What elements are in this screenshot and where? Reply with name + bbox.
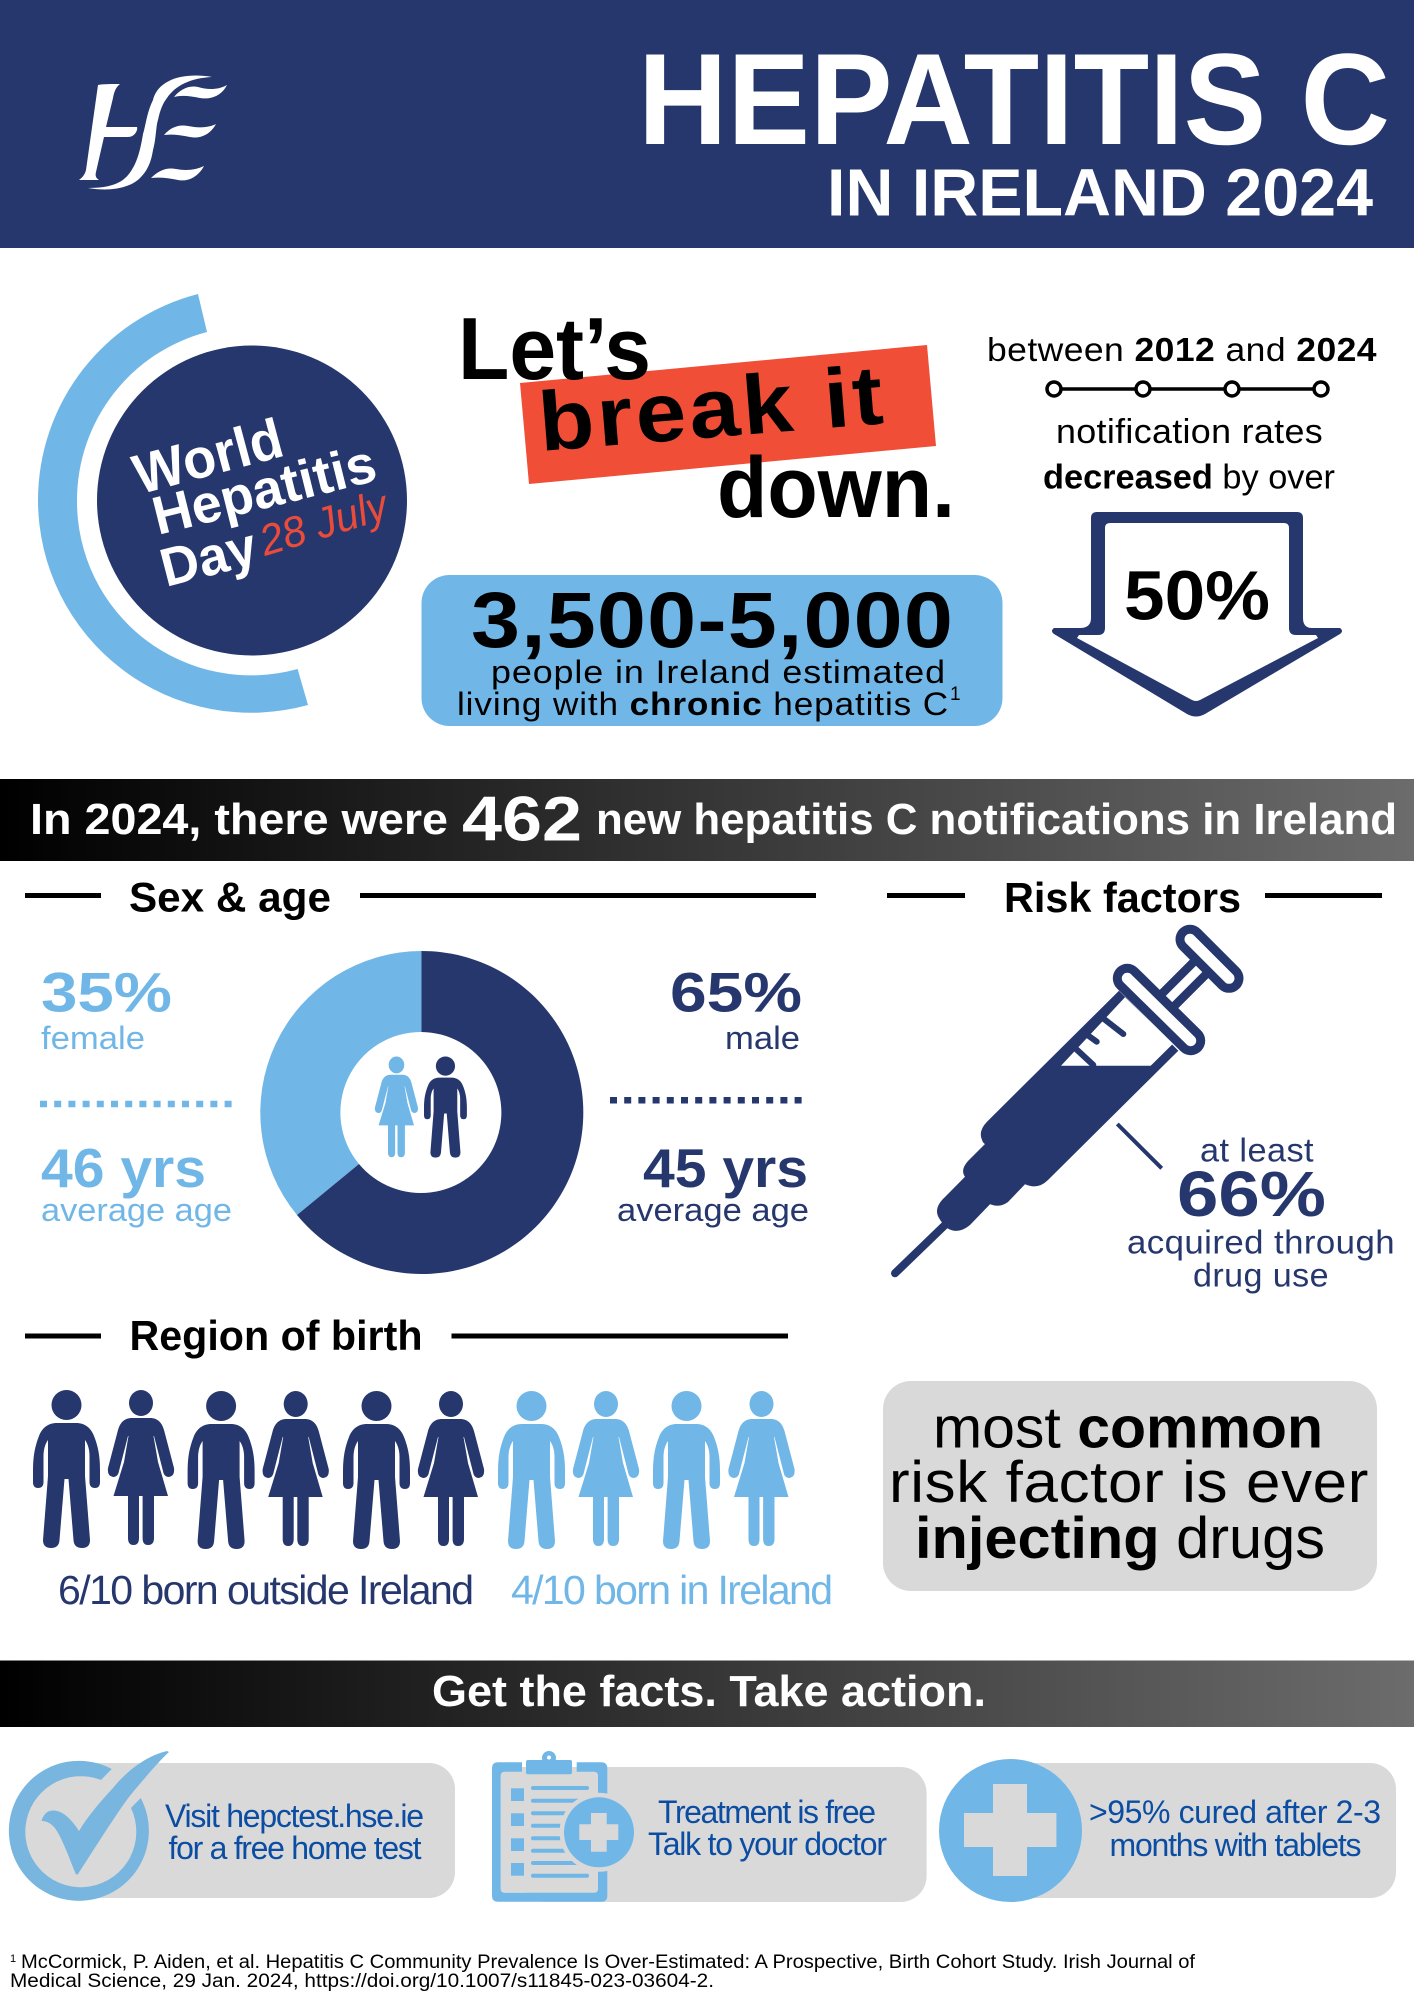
female stats [40, 960, 232, 1228]
male stats [610, 960, 809, 1228]
action card: free treatment: Talk to your doctor [648, 1826, 887, 1862]
heading: Region of birth [25, 1312, 788, 1359]
heading: Sex & age [25, 874, 816, 920]
banner: new notifications: new hepatitis C notifications in Ireland [596, 795, 1397, 844]
footnote: Medical Science, 29 Jan. 2024, https://doi.org/10.1007/s11845-023-03604-2. [10, 1971, 714, 1992]
footnote [10, 1952, 1196, 1992]
notification rate trend: notification rates [1056, 413, 1323, 451]
panel: region of birth [25, 1312, 833, 1613]
badge: World Hepatitis Day: World [126, 406, 289, 506]
banner: new notifications: 462 [462, 784, 582, 854]
banner: get the facts: Get the facts. Take action. [432, 1667, 986, 1716]
female stats: 46 yrs [41, 1137, 206, 1199]
notification rate trend: between 2012 and 2024 [987, 331, 1377, 368]
pictogram: 4 of 10 born in Ireland [498, 1391, 795, 1549]
subtitle: IN IRELAND 2024 [827, 156, 1373, 230]
panel: risk factors [883, 874, 1395, 1591]
heading: Risk factors [887, 874, 1382, 921]
stat: 66% drug use: acquired through [1127, 1224, 1395, 1260]
icon: HSE logo [79, 76, 227, 190]
female stats: average age [41, 1192, 232, 1228]
icon: checkmark [9, 1751, 169, 1901]
slogan: Let's break it down: break it [535, 347, 889, 469]
male stats: 45 yrs [643, 1137, 808, 1199]
title: HEPATITIS C [638, 26, 1390, 172]
arrow: 50% decrease [1052, 512, 1342, 716]
panel: sex and age [25, 874, 816, 1274]
slogan: Let's break it down: down. [717, 440, 955, 536]
arrow: 50% decrease: 50% [1124, 556, 1270, 634]
badge: World Hepatitis Day: Hepatitis [146, 433, 382, 547]
male stats: average age [617, 1192, 809, 1228]
label: born outside Ireland: 6/10 born outside Ireland [58, 1567, 474, 1613]
label: born in Ireland: 4/10 born in Ireland [511, 1567, 833, 1613]
callout: estimated people: 3,500-5,000 [471, 575, 954, 664]
stat: 66% drug use: drug use [1193, 1256, 1329, 1294]
male stats: male [725, 1020, 800, 1056]
action card: free treatment: Treatment is free [658, 1794, 876, 1830]
banner: get the facts [0, 1660, 1414, 1727]
callout: estimated people: 1 [950, 684, 961, 705]
action card: cure rate: >95% cured after 2-3 [1089, 1794, 1381, 1830]
icon: clipboard [492, 1751, 638, 1902]
heading: Risk factors: Risk factors [1004, 874, 1241, 921]
female stats: 35% [41, 960, 172, 1024]
callout: most common risk factor [883, 1381, 1377, 1591]
callout: most common risk factor: risk factor is ever [889, 1450, 1369, 1515]
icon: syringe [895, 939, 1229, 1273]
callout: most common risk factor: injecting drugs [915, 1506, 1325, 1571]
pictogram: 6 of 10 born outside Ireland [33, 1390, 484, 1549]
banner: new notifications: In 2024, there were [30, 795, 448, 844]
action card: home test: for a free home test [168, 1830, 422, 1866]
timeline [1047, 382, 1328, 396]
header band [0, 0, 1414, 248]
badge: World Hepatitis Day: 28 July [253, 481, 395, 566]
icon: medical cross [939, 1759, 1082, 1902]
slogan: Let's break it down [458, 299, 955, 536]
callout: estimated people: living with chronic hepatitis C [457, 686, 949, 722]
heading: Region of birth: Region of birth [130, 1312, 422, 1359]
female stats: female [41, 1020, 145, 1056]
donut chart [260, 951, 583, 1274]
action card: home test: Visit hepctest.hse.ie [165, 1798, 424, 1834]
male stats: 65% [670, 960, 802, 1024]
badge: World Hepatitis Day: Day [154, 516, 263, 599]
heading: Sex & age: Sex & age [129, 874, 331, 920]
action card: cure rate: months with tablets [1110, 1827, 1362, 1863]
stat: 66% drug use [1127, 1132, 1395, 1294]
callout: most common risk factor: most common [933, 1396, 1323, 1460]
notification rate trend [987, 331, 1377, 716]
slogan: Let's break it down: Let’s [458, 299, 651, 398]
notification rate trend: decreased by over [1043, 458, 1335, 496]
action card: home test [9, 1751, 455, 1901]
footnote: 1 [10, 1953, 16, 1965]
banner: new notifications [0, 779, 1414, 861]
callout: estimated people [422, 575, 1002, 726]
stat: 66% drug use: 66% [1177, 1158, 1326, 1230]
callout: estimated people: people in Ireland estimated [491, 654, 946, 690]
footnote: McCormick, P. Aiden, et al. Hepatitis C Community Prevalence Is Over-Estimated: A Prospective, Birth Cohort Study. Irish Journal of [21, 1952, 1196, 1973]
action card: cure rate [939, 1759, 1396, 1902]
badge: World Hepatitis Day [38, 294, 407, 713]
action card: free treatment [492, 1751, 927, 1902]
stat: 66% drug use: at least [1200, 1132, 1314, 1168]
